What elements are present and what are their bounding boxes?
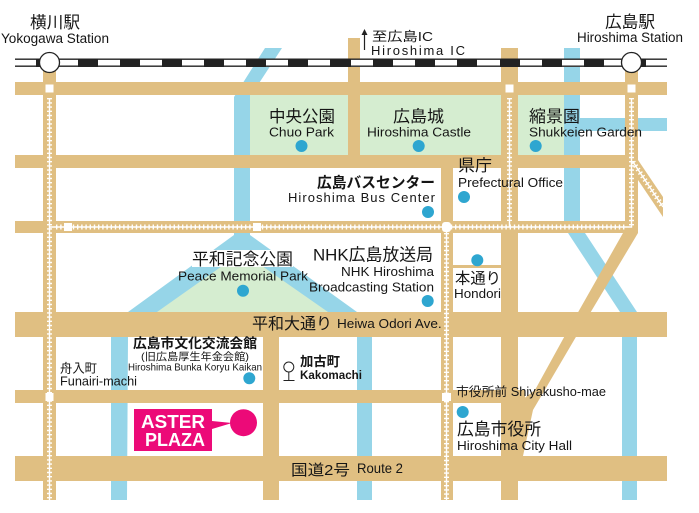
icon: tram stop pin xyxy=(284,362,294,380)
label: Hiroshima Bus Center: Hiroshima Bus Center xyxy=(288,190,436,205)
label: Bunka Koryu Kaikan: Hiroshima Bunka Koryu Kaikan xyxy=(128,362,262,374)
label: Hondori: 本通り xyxy=(455,269,501,287)
label: Kakomachi xyxy=(300,353,362,382)
label: Funairi-machi: Funairi-machi xyxy=(60,375,137,389)
label: Hiroshima IC: Hiroshima IC xyxy=(371,43,465,58)
label: Route 2 xyxy=(291,460,403,479)
label: Shukkeien Garden: 縮景園 xyxy=(529,107,580,126)
label: Bunka Koryu Kaikan xyxy=(128,335,262,374)
label: Prefectural Office: Prefectural Office xyxy=(458,175,563,190)
station circle: Hiroshima xyxy=(622,52,642,72)
label: Hondori: Hondori xyxy=(454,286,501,301)
tram lines xyxy=(49,98,663,500)
label: Heiwa Odori Ave.: Heiwa Odori Ave. xyxy=(337,316,442,331)
arrow: to Hiroshima IC xyxy=(362,29,368,50)
label: Heiwa Odori Ave. xyxy=(252,315,442,333)
label: Hiroshima Bus Center xyxy=(288,174,436,205)
label: NHK Hiroshima: NHK Hiroshima xyxy=(341,264,435,279)
label: Chuo Park: Chuo Park xyxy=(269,124,335,140)
label: Kakomachi: Kakomachi xyxy=(300,368,362,382)
label: Funairi-machi: 舟入町 xyxy=(60,362,97,376)
callout: Aster Plaza: ASTER xyxy=(141,412,205,432)
label: Chuo Park: 中央公園 xyxy=(269,107,335,126)
label: Hiroshima Station xyxy=(577,12,683,45)
label: Bunka Koryu Kaikan: 広島市文化交流会館 xyxy=(133,335,257,351)
label: Hiroshima Station: Hiroshima Station xyxy=(577,30,683,45)
label: Hiroshima IC xyxy=(371,29,465,58)
label: Route 2: Route 2 xyxy=(357,460,403,476)
rivers xyxy=(111,48,667,500)
tram stops xyxy=(46,84,636,401)
label: Route 2: 国道2号 xyxy=(291,462,350,479)
label: Hiroshima Castle xyxy=(367,107,471,140)
label: Bunka Koryu Kaikan: (旧広島厚生年金会館) xyxy=(141,350,249,363)
parks xyxy=(157,95,564,312)
label: NHK Hiroshima xyxy=(309,246,435,295)
label: Hiroshima Station: 広島駅 xyxy=(605,12,655,32)
label: Yokogawa Station xyxy=(1,13,109,46)
label: Prefectural Office: 県庁 xyxy=(458,156,492,175)
label: Chuo Park xyxy=(269,107,335,140)
label: Shukkeien Garden: Shukkeien Garden xyxy=(529,124,642,140)
label: Peace Memorial Park xyxy=(178,250,309,284)
label: Hiroshima Castle: Hiroshima Castle xyxy=(367,124,471,140)
label: Shiyakusho-mae: 市役所前 Shiyakusho-mae xyxy=(456,384,606,399)
label backing: peace park xyxy=(192,250,293,267)
label: Funairi-machi xyxy=(60,362,137,389)
label: Hiroshima City Hall: Hiroshima City Hall xyxy=(457,438,572,453)
label: Kakomachi: 加古町 xyxy=(300,353,340,369)
station circle: Yokogawa xyxy=(40,52,60,72)
label: Heiwa Odori Ave.: 平和大通り xyxy=(252,315,332,333)
label: Yokogawa Station: 横川駅 xyxy=(30,13,80,32)
label: Hiroshima City Hall: 広島市役所 xyxy=(457,420,541,439)
label: Hiroshima Bus Center: 広島バスセンター xyxy=(317,174,435,192)
label: Shukkeien Garden xyxy=(529,107,642,140)
callout: Aster Plaza: PLAZA xyxy=(145,430,205,450)
railway xyxy=(15,59,667,67)
callout: Aster Plaza xyxy=(134,409,257,451)
label: Peace Memorial Park: Peace Memorial Park xyxy=(178,268,309,284)
label: Hondori xyxy=(454,269,501,301)
label: NHK Hiroshima: Broadcasting Station xyxy=(309,280,434,295)
label: Hiroshima City Hall xyxy=(457,420,572,453)
label: NHK Hiroshima: NHK広島放送局 xyxy=(313,246,433,265)
location dots xyxy=(237,140,542,418)
label: Hiroshima Castle: 広島城 xyxy=(393,107,444,126)
label: Peace Memorial Park: 平和記念公園 xyxy=(192,250,293,269)
label: Prefectural Office xyxy=(458,156,563,190)
label: Hiroshima IC: 至広島IC xyxy=(372,29,433,44)
label: Yokogawa Station: Yokogawa Station xyxy=(1,31,109,46)
